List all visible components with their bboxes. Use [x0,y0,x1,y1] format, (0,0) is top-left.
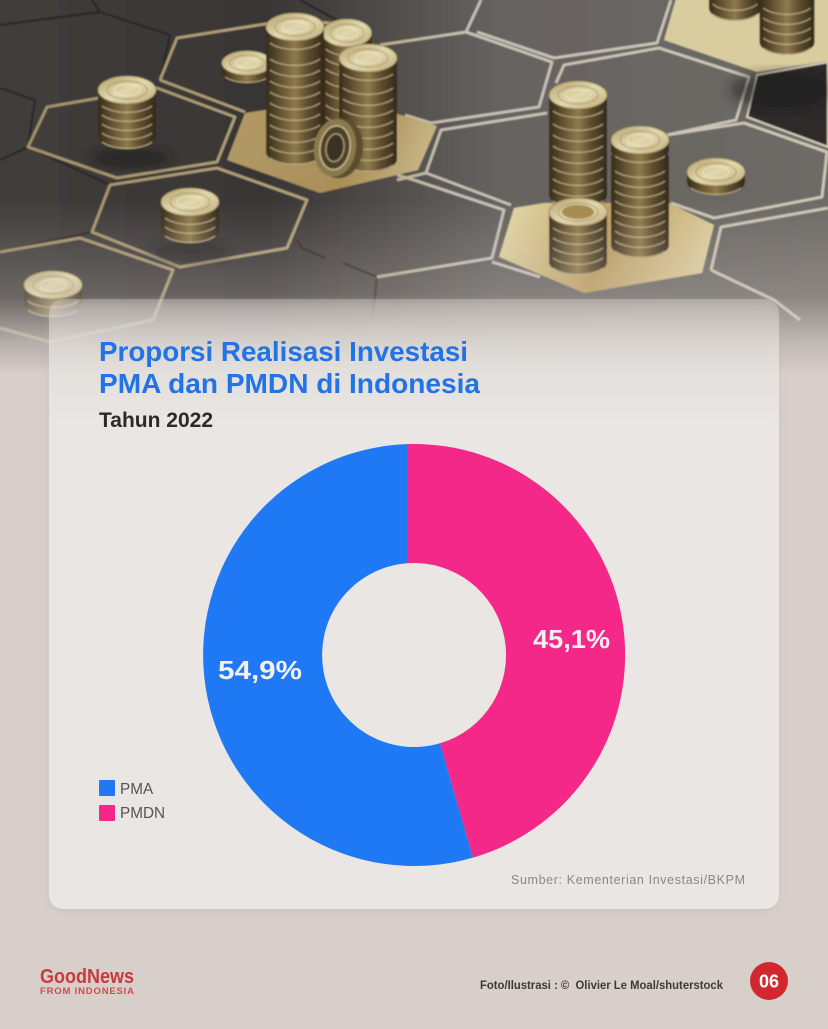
logo: GoodNews from Indonesia: FROM INDONESIA [40,986,134,997]
photo credit: Foto/Ilustrasi : © Olivier Le Moal/shuterstock [480,980,724,992]
panel: chart card [49,299,779,911]
page number badge [750,962,788,1000]
source note: Sumber: Kementerian Investasi/BKPM [511,873,745,887]
icon: upper right-centre coin stack [549,81,607,208]
icon: tallest coin stack [266,13,324,165]
value label: PMDN: 45,1% [533,624,610,654]
page number badge: 06 [759,972,779,992]
heading: PMA dan PMDN di Indonesia [99,368,480,399]
legend item: PMA: PMA [120,781,154,798]
heading [99,336,480,399]
subheading: Tahun 2022 [99,409,213,432]
icon: standing coin [310,115,367,181]
icon: two coin stack [24,271,82,317]
logo: GoodNews from Indonesia [40,966,134,997]
icon: single coin [687,158,745,195]
logo: GoodNews from Indonesia: GoodNews [40,966,134,988]
value label: PMA: 54,9% [218,655,302,685]
photo fade into background [0,200,828,390]
icon: right coin stack [611,126,669,258]
icon: top-right coin stacks [709,0,815,55]
icon: front coin stack [339,44,397,172]
donut chart [203,444,625,866]
heading: Proporsi Realisasi Investasi [99,336,468,367]
donut segment: PMDN [407,444,625,858]
donut segment: PMA [203,444,473,866]
icon: small coin stack [98,76,156,149]
icon: flat coin left of big stack [222,51,272,83]
legend [99,780,165,822]
icon: lower right-centre coin stack [549,198,607,275]
photo: coin stacks on hexagon board [0,0,828,375]
icon: rear coin stack [322,19,372,136]
legend item: PMDN: PMDN [120,805,165,822]
icon: three coin stack [161,188,219,243]
